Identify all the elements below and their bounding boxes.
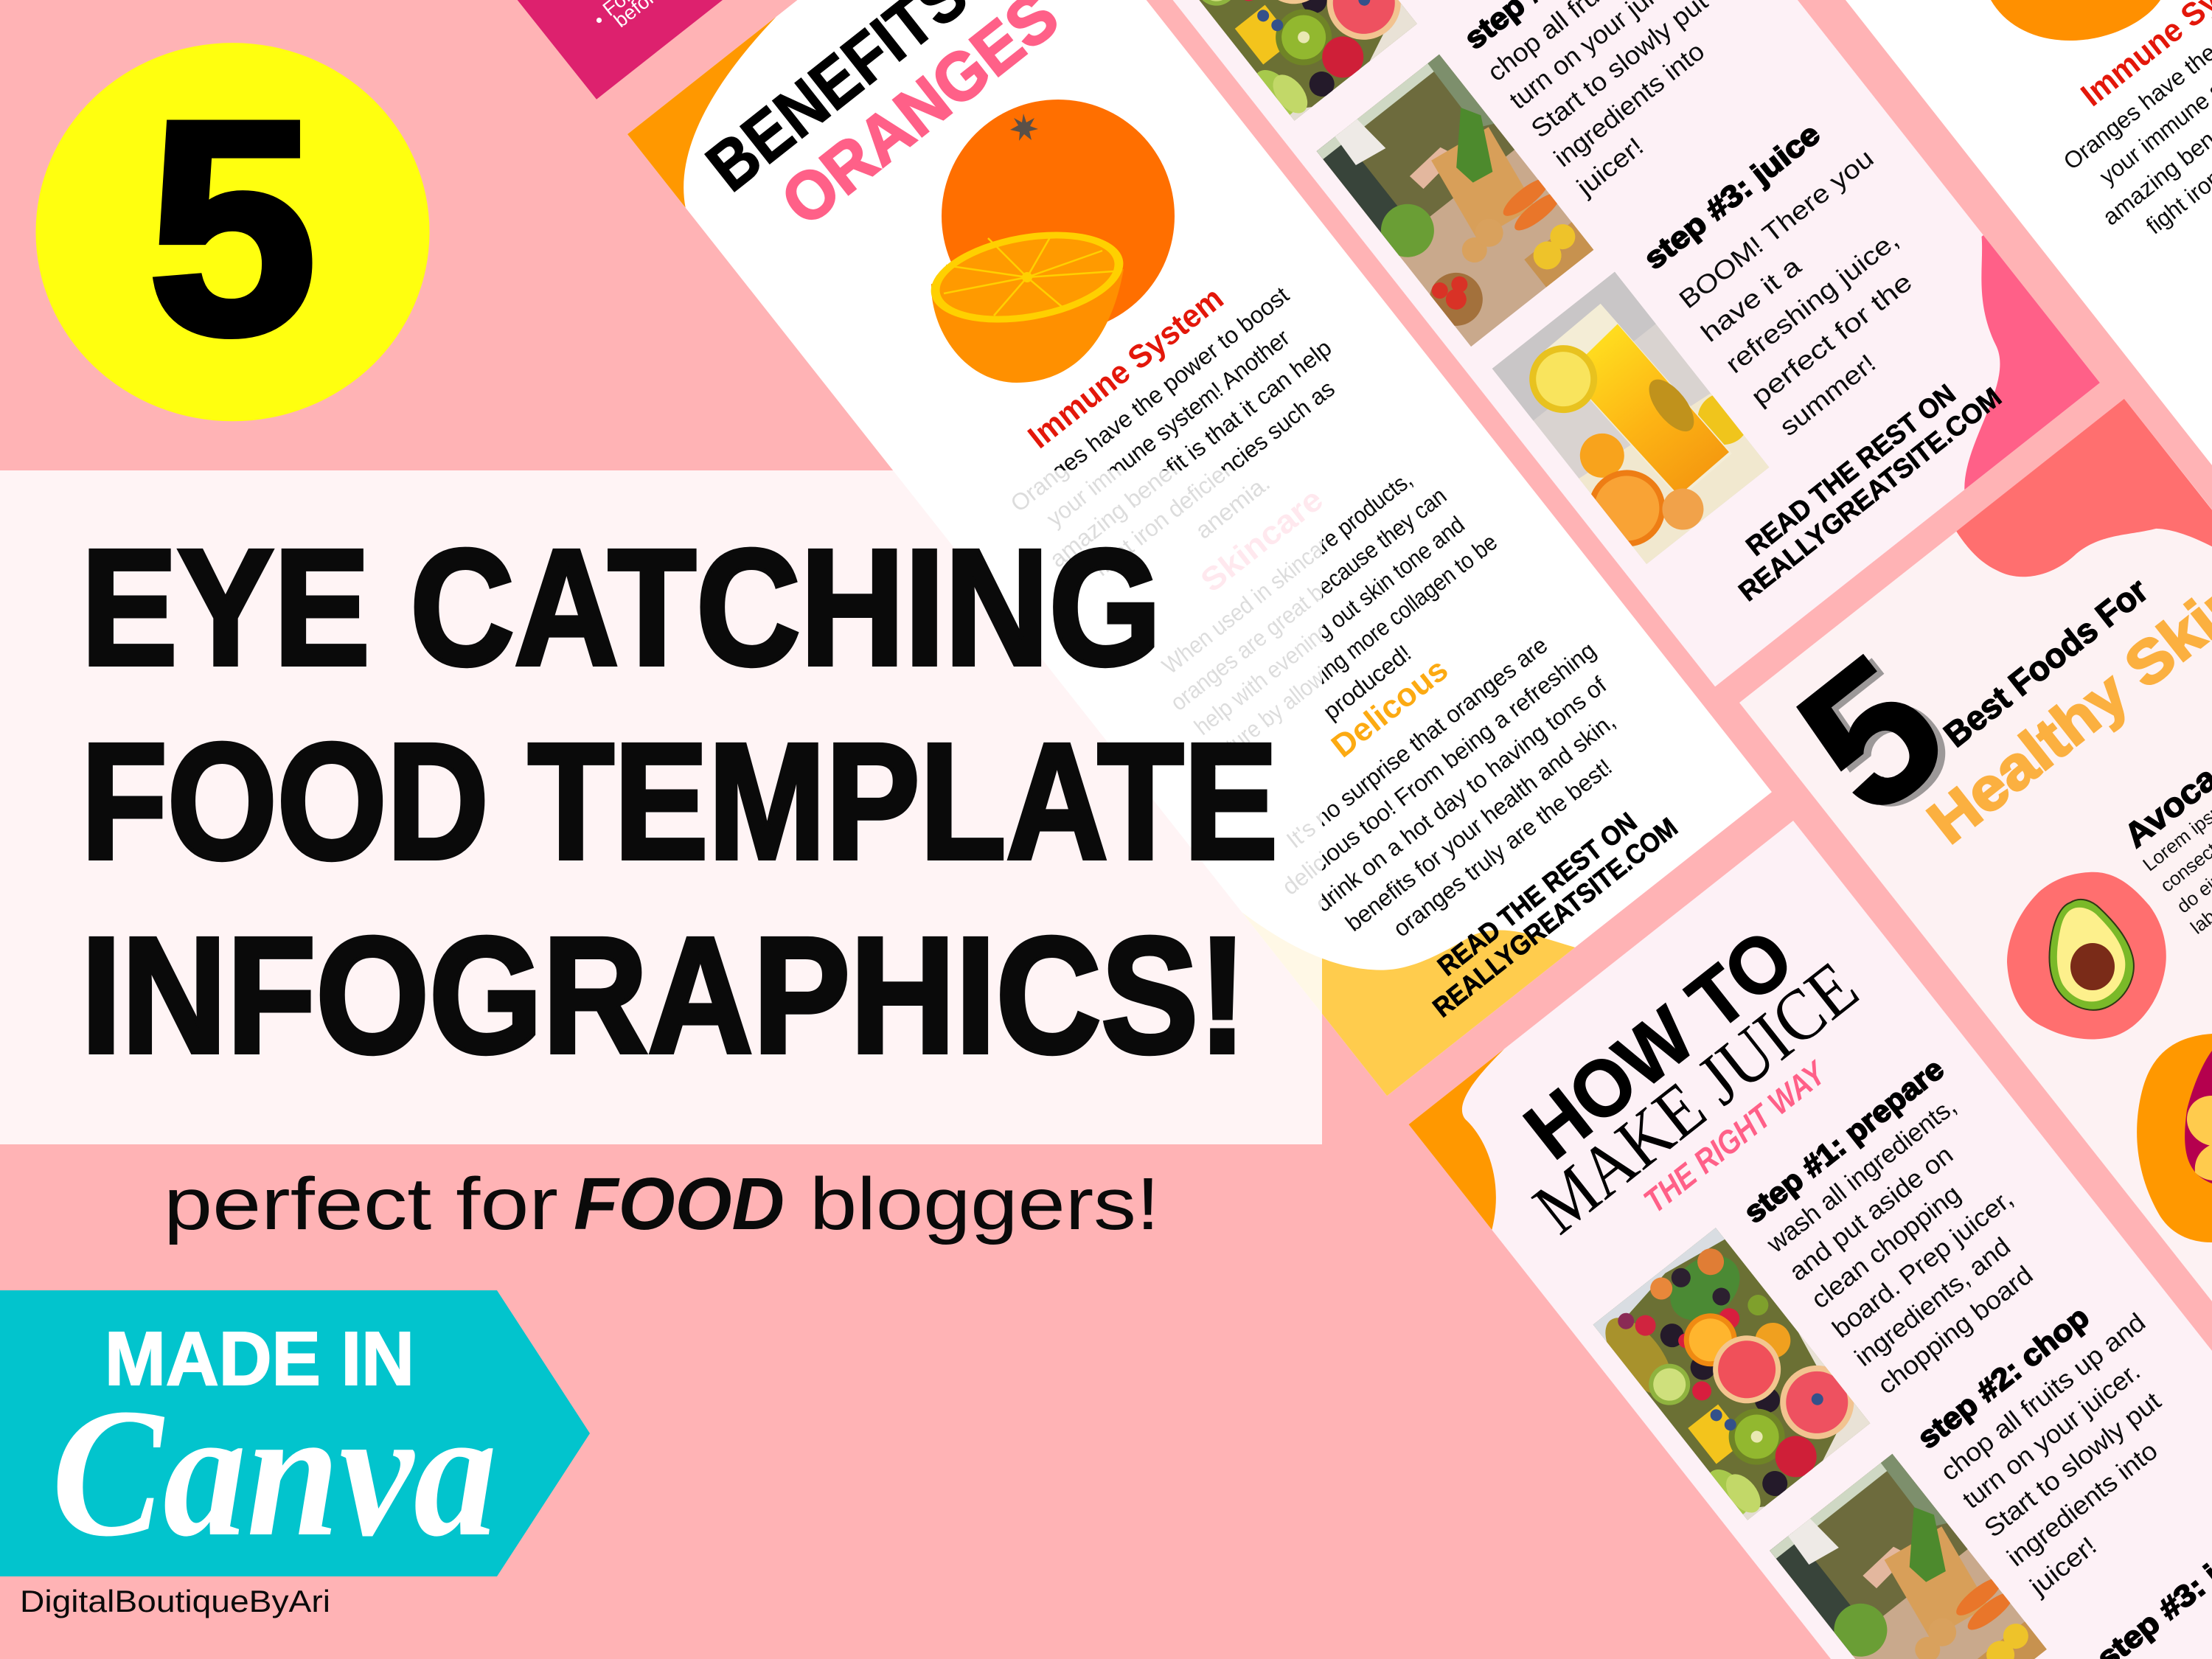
panel: benefits of oranges poster: Oranges have the power to boost <box>1006 282 1294 517</box>
panel: how to make juice poster, lower copy: Start to slowly put <box>1979 1386 2166 1543</box>
panel: 5 best foods poster: 5 <box>1767 616 1993 858</box>
panel: how to make juice poster, upper copy: juicer! <box>1571 132 1649 202</box>
panel: benefits of oranges poster <box>627 0 1772 1096</box>
panel: how to make juice poster, lower copy: clean chopping <box>1806 1180 1966 1315</box>
panel: benefits of oranges poster: REALLYGREATSITE.COM <box>1427 812 1683 1023</box>
icon: halved orange, cropped <box>1991 0 2160 41</box>
panel: benefits of oranges poster: READ THE REST ON <box>1432 807 1642 981</box>
panel: how to make juice poster, lower copy: step #1: prepare <box>1737 1051 1950 1230</box>
panel: benefits of oranges poster: your immune system! Another <box>1042 324 1295 532</box>
panel: benefits of oranges poster: amazing benefit is that it can help <box>1045 334 1337 573</box>
icon: yellow circle with number 5: 5 <box>147 58 317 397</box>
panel: benefits of oranges poster: It's no surprise that oranges are <box>1281 631 1553 853</box>
photo: chopping vegetables <box>1763 1449 2053 1659</box>
subtitle <box>164 1163 1160 1245</box>
panel: how to make juice poster, lower copy: step #2: chop <box>1911 1300 2096 1455</box>
panel: how to make juice poster, lower copy <box>1408 821 2212 1659</box>
panel: benefits of oranges poster: When used in skincare products, <box>1157 466 1417 679</box>
icon: whole and halved orange <box>924 100 1175 383</box>
badge: made in canva: Canva <box>52 1371 497 1575</box>
panel: benefits of oranges poster: drink on a hot day to having tons of <box>1310 672 1611 917</box>
panel: benefits of oranges poster: Delicous <box>1325 651 1455 765</box>
panel: benefits of oranges poster: texture by allowing more collagen to be <box>1199 529 1502 776</box>
photo: fruit platter <box>1582 1222 1877 1530</box>
panel: how to make juice poster, upper copy: REALLYGREATSITE.COM <box>1733 382 2007 607</box>
panel: 5 best foods poster: Best Foods For <box>1936 570 2155 754</box>
panel: magenta poster corner <box>518 0 723 100</box>
panel: how to make juice poster, lower copy: turn on your juicer. <box>1957 1357 2146 1514</box>
panel: how to make juice poster, lower copy: wash all ingredients, <box>1761 1092 1961 1259</box>
panel: benefits of oranges poster: fight iron deficiencies such as <box>1088 375 1340 581</box>
panel: how to make juice poster, upper copy <box>956 0 2100 686</box>
title: INFOGRAPHICS! <box>81 903 1247 1088</box>
panel: how to make juice poster, upper copy: summer! <box>1774 349 1881 442</box>
panel: how to make juice poster, lower copy: chop all fruits up and <box>1935 1308 2151 1486</box>
credit: DigitalBoutiqueByAri <box>20 1584 330 1618</box>
panel: benefits of oranges poster: anemia. <box>1190 469 1275 544</box>
icon: yellow circle with number 5 <box>35 43 429 421</box>
panel: how to make juice poster, upper copy: refreshing juice, <box>1720 226 1905 379</box>
panel: benefits of oranges poster: produced! <box>1318 639 1416 725</box>
panel: how to make juice poster, lower copy: ingredients, and <box>1849 1232 2016 1372</box>
panel: how to make juice poster, lower copy: juicer! <box>2024 1531 2102 1601</box>
badge: made in canva: MADE IN <box>105 1316 414 1401</box>
panel: benefits of oranges poster: help with evening out skin tone and <box>1189 511 1470 740</box>
badge: made in canva <box>0 1290 590 1576</box>
panel: how to make juice poster, lower copy: ingredients into <box>2002 1436 2163 1572</box>
panel: how to make juice poster, lower copy: MAKE JUICE <box>1519 946 1873 1249</box>
panel: benefits of oranges poster: delicious too! From being a refreshing <box>1277 636 1601 900</box>
subtitle: bloggers! <box>810 1163 1160 1245</box>
panel: benefits of oranges poster: oranges are great because they can <box>1165 482 1451 716</box>
panel: how to make juice poster, upper copy: ingredients into <box>1548 37 1710 173</box>
photo: orange juice glass <box>1477 260 1785 576</box>
panel: benefits of oranges poster: oranges truly are the best! <box>1388 754 1617 942</box>
icon: sweet potato <box>2137 1034 2212 1242</box>
subtitle: FOOD <box>574 1163 785 1245</box>
panel: how to make juice poster, upper copy: perfect for the <box>1746 268 1918 411</box>
title: FOOD TEMPLATE <box>81 709 1278 894</box>
title: EYE CATCHING <box>81 515 1161 700</box>
panel: how to make juice poster, lower copy: and put aside on <box>1784 1140 1958 1287</box>
panel: benefits of oranges poster: Skincare <box>1194 481 1330 599</box>
panel: how to make juice poster, upper copy: BOOM! There you <box>1674 144 1879 314</box>
icon: avocado <box>2007 872 2166 1040</box>
panel: 5 best foods poster <box>1739 396 2212 1301</box>
panel: benefits of oranges poster: Immune System <box>1021 280 1230 456</box>
panel: how to make juice poster, lower copy: THE RIGHT WAY <box>1637 1053 1834 1220</box>
panel: how to make juice poster, lower copy: chopping board <box>1872 1260 2039 1400</box>
title <box>81 515 1278 1088</box>
panel: how to make juice poster, upper copy: step #3: juice <box>1638 116 1826 276</box>
panel: how to make juice poster, upper copy: READ THE REST ON <box>1740 378 1961 562</box>
panel: how to make juice poster, upper copy: have it a <box>1696 251 1807 348</box>
panel: 5 best foods poster: 5 <box>1759 613 1984 856</box>
photo: chopping vegetables <box>1310 49 1599 352</box>
panel: how to make juice poster, lower copy: HOW TO <box>1509 912 1809 1176</box>
subtitle: perfect for <box>164 1163 558 1245</box>
panel: benefits of oranges poster: benefits for your health and skin, <box>1340 708 1620 936</box>
panel: how to make juice poster, lower copy: board. Prep juicer, <box>1827 1184 2019 1343</box>
translucent headline band <box>0 470 1322 1144</box>
panel: benefits of oranges poster, upper right copy <box>1846 0 2212 465</box>
photo: fruit platter <box>1128 0 1424 131</box>
